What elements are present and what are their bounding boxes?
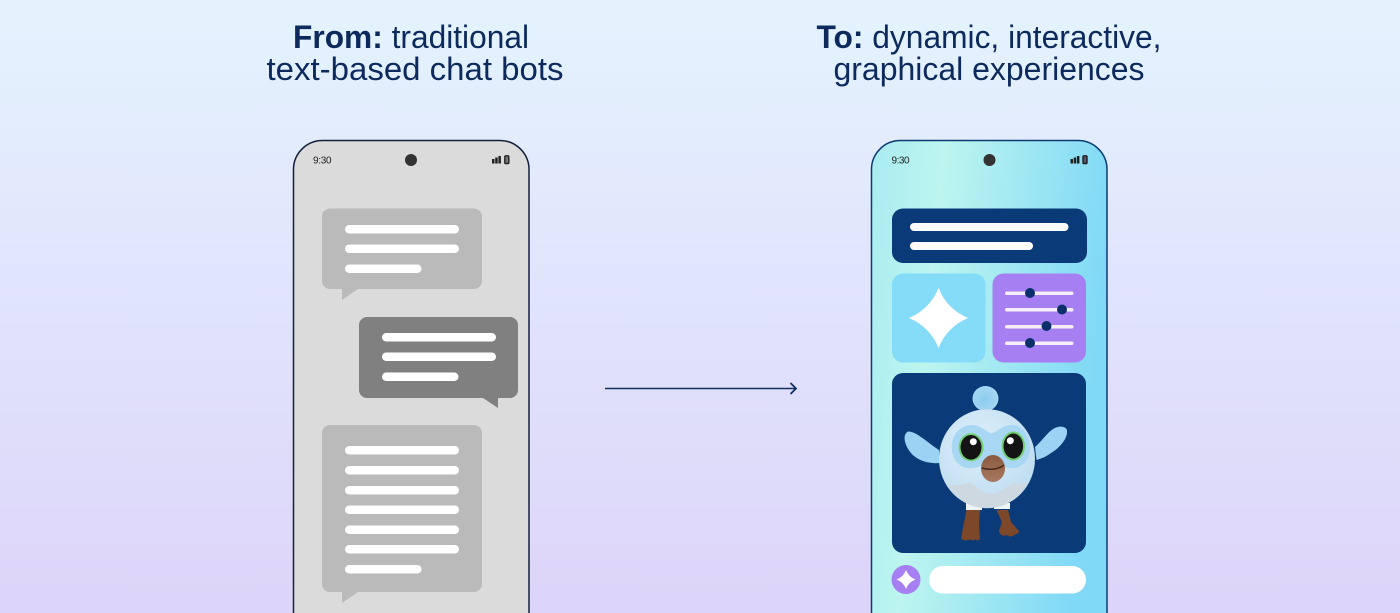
title: to: graphical experiences [834,51,1144,87]
belly [948,483,1027,508]
tile: sliders [992,274,1086,362]
left eye [958,433,984,461]
media card with bird [892,373,1086,553]
status icons [1070,156,1087,164]
chat bubble 2 [359,317,518,408]
right eye [1002,432,1025,460]
title: to [816,19,1162,87]
chat bubble 1 [322,208,482,300]
status bar: time: 9:30 [313,156,332,166]
tile: sparkle [892,274,986,362]
camera [405,154,417,166]
status icons [492,156,509,164]
arrow [605,383,796,394]
wings [905,431,940,463]
chat bubble 3 [322,425,482,603]
assistant sparkle button [892,565,920,594]
beak [981,455,1005,482]
bird character [905,386,1067,540]
title: to: To: dynamic, interactive, [816,19,1162,55]
legs and feet [961,510,1019,540]
input pill [929,566,1086,594]
eye mask [952,425,1030,468]
status bar: time: 9:30 [892,156,910,166]
tuft [972,386,998,411]
camera [984,154,996,166]
phone: graphical experience [871,140,1107,613]
body [939,409,1035,508]
title: from: From: traditional [293,19,529,55]
title: from: text-based chat bots [266,51,564,87]
title: from [266,19,564,87]
header card [892,208,1087,263]
phone: traditional chat [293,140,529,613]
